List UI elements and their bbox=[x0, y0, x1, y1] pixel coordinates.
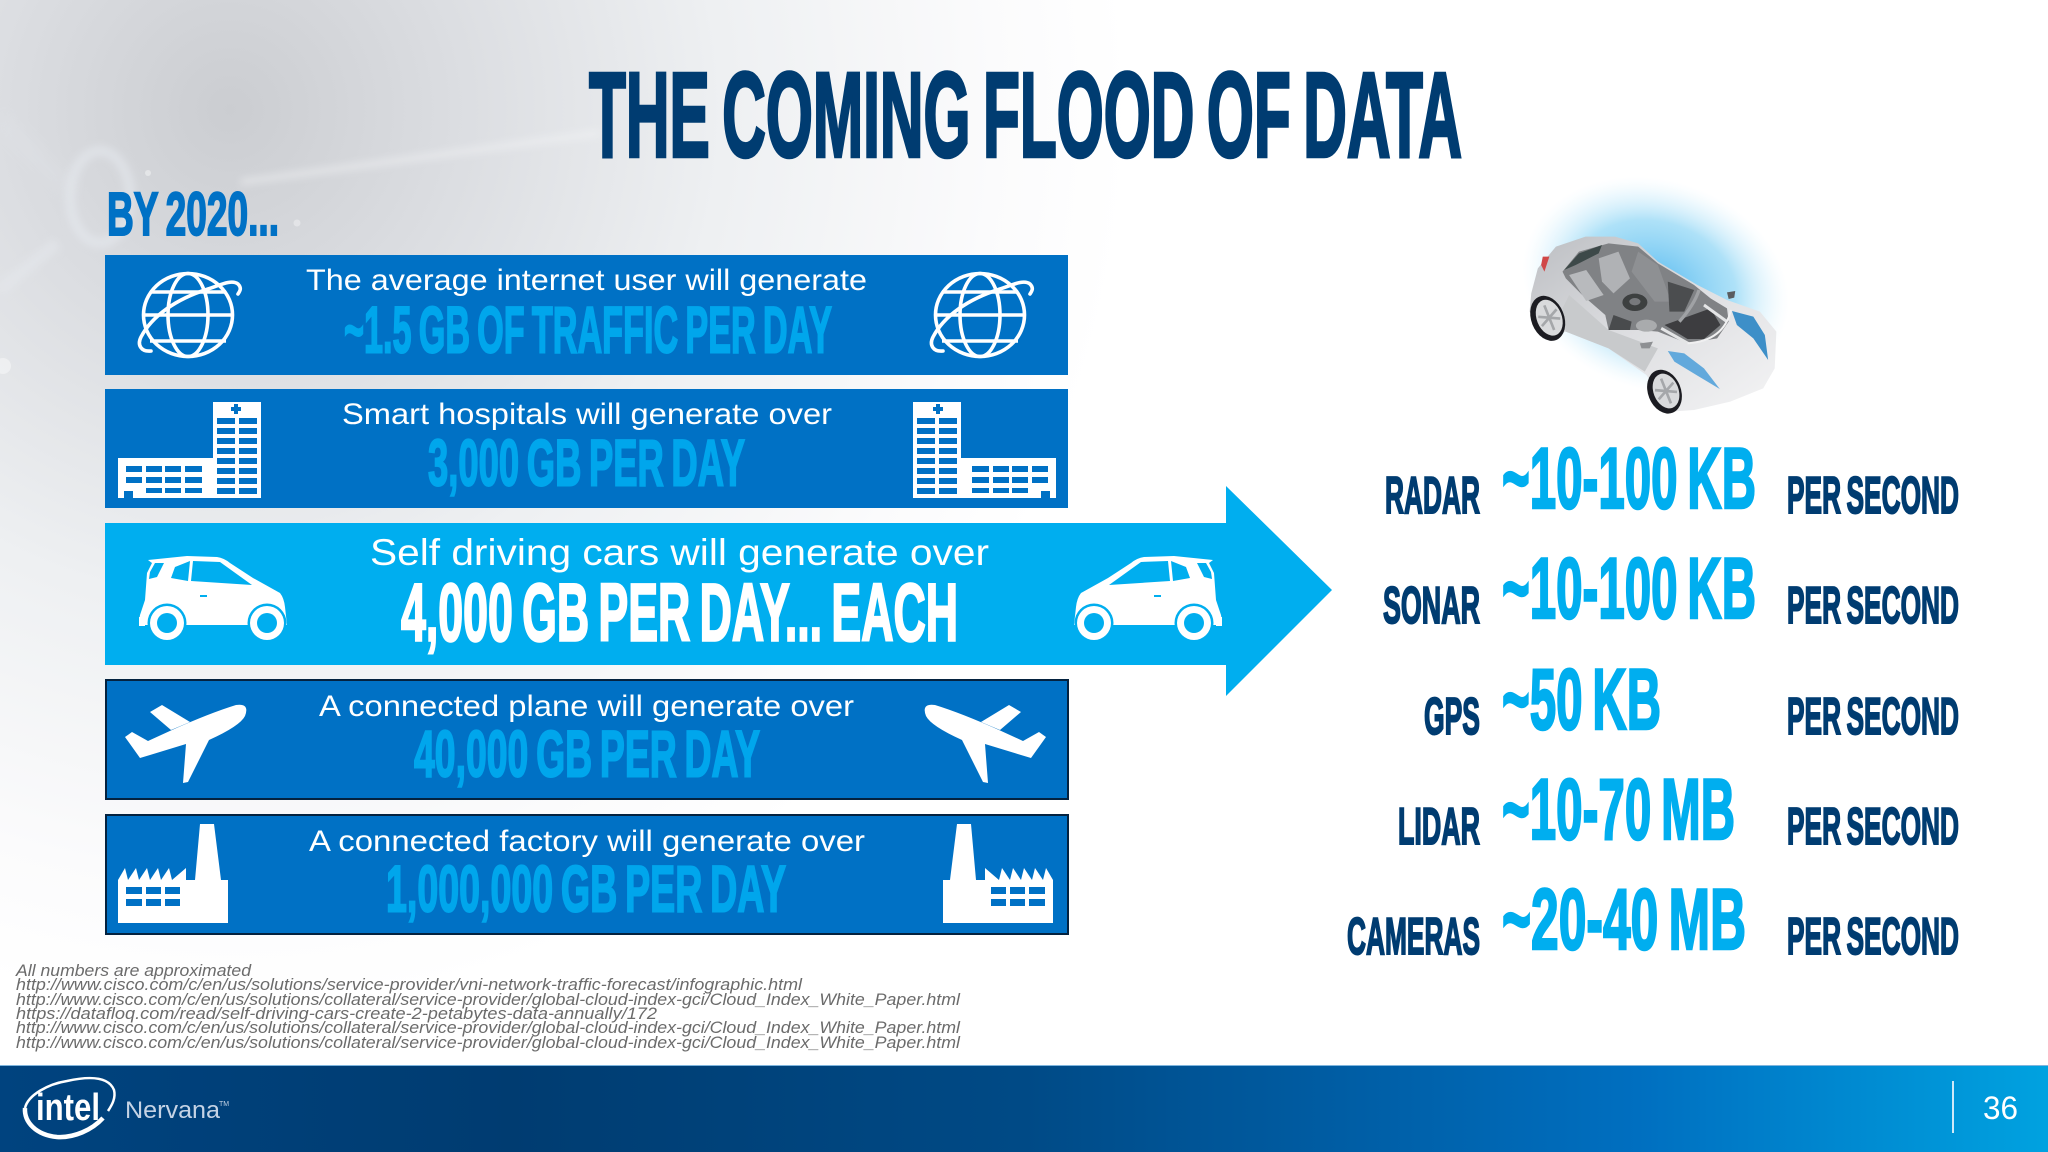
footnotes: sources: http://www.cisco.com/c/en/us/solutions/service-provider/vni-network-traffic-forecast/infographic.html bbox=[16, 975, 803, 994]
icon: car left bbox=[139, 556, 287, 642]
panel: connected plane bbox=[106, 680, 1068, 799]
panel: connected plane: 40,000 GB PER DAY bbox=[414, 716, 760, 790]
sensor row: radar: RADAR bbox=[1385, 467, 1480, 525]
footnotes: sources bbox=[15, 961, 961, 1052]
icon: factory right bbox=[943, 824, 1053, 923]
footnotes: sources: http://www.cisco.com/c/en/us/solutions/collateral/service-provider/global-cloud-index-gci/Cloud_Index_White_Paper.html bbox=[16, 990, 961, 1009]
sensor row: radar: ~10-100 KB bbox=[1502, 431, 1756, 527]
panel: self driving cars arrow bbox=[105, 486, 1332, 696]
panel: connected factory bbox=[106, 815, 1068, 934]
car image with sensor glow bbox=[1494, 143, 1818, 427]
sensor row: cameras: ~20-40 MB bbox=[1502, 872, 1746, 968]
panel: internet user bbox=[105, 255, 1068, 375]
page number: 36 bbox=[1983, 1090, 2018, 1126]
icon: plane left bbox=[125, 705, 246, 783]
sensor row: cameras: CAMERAS bbox=[1347, 908, 1480, 966]
sensor row: sonar: SONAR bbox=[1383, 577, 1480, 635]
panel: self driving cars arrow: Self driving cars will generate over bbox=[370, 532, 989, 573]
sensor row: lidar: ~10-70 MB bbox=[1502, 762, 1735, 858]
panel: smart hospitals: Smart hospitals will generate over bbox=[342, 398, 832, 431]
panel: internet user: ~1.5 GB OF TRAFFIC PER DAY bbox=[344, 292, 832, 366]
panel: connected plane: A connected plane will generate over bbox=[319, 690, 854, 723]
panel: connected factory: A connected factory will generate over bbox=[309, 825, 865, 858]
logo: intel: Nervana bbox=[125, 1097, 221, 1124]
sensor row: gps bbox=[1424, 652, 1959, 748]
footnotes: sources: http://www.cisco.com/c/en/us/solutions/collateral/service-provider/global-cloud-index-gci/Cloud_Index_White_Paper.html bbox=[16, 1018, 961, 1037]
footnotes: sources: http://www.cisco.com/c/en/us/solutions/collateral/service-provider/global-cloud-index-gci/Cloud_Index_White_Paper.html bbox=[16, 1033, 961, 1052]
icon: globe left bbox=[139, 274, 240, 356]
footnotes: sources: All numbers are approximated bbox=[15, 961, 252, 980]
logo: intel: TM bbox=[219, 1101, 229, 1108]
logo: intel bbox=[25, 1078, 229, 1137]
icon: globe right bbox=[931, 274, 1032, 356]
panel: connected factory: 1,000,000 GB PER DAY bbox=[386, 852, 786, 926]
footnotes: sources: https://datafloq.com/read/self-driving-cars-create-2-petabytes-data-annually/172 bbox=[16, 1004, 658, 1023]
footer divider bbox=[1952, 1081, 1954, 1133]
panel: smart hospitals: 3,000 GB PER DAY bbox=[428, 426, 745, 500]
icon: car right bbox=[1074, 556, 1222, 642]
sensor row: sonar: ~10-100 KB bbox=[1502, 541, 1756, 637]
sensor row: gps: GPS bbox=[1424, 688, 1480, 746]
icon: plane right bbox=[925, 705, 1046, 783]
logo: intel: intel bbox=[36, 1087, 100, 1129]
sensor row: gps: ~50 KB bbox=[1502, 652, 1661, 748]
icon: hospital right bbox=[913, 402, 1056, 498]
heading: by 2020: BY 2020... bbox=[107, 180, 279, 248]
sensor row: cameras bbox=[1347, 872, 1959, 968]
sensor row: lidar: LIDAR bbox=[1398, 798, 1480, 856]
panel: internet user: The average internet user will generate bbox=[306, 264, 867, 297]
footer bar bbox=[0, 1065, 2048, 1152]
icon: factory left bbox=[118, 824, 228, 923]
panel: smart hospitals bbox=[105, 389, 1068, 508]
panel: self driving cars arrow: 4,000 GB PER DAY... EACH bbox=[401, 568, 958, 658]
icon: hospital left bbox=[118, 402, 261, 498]
